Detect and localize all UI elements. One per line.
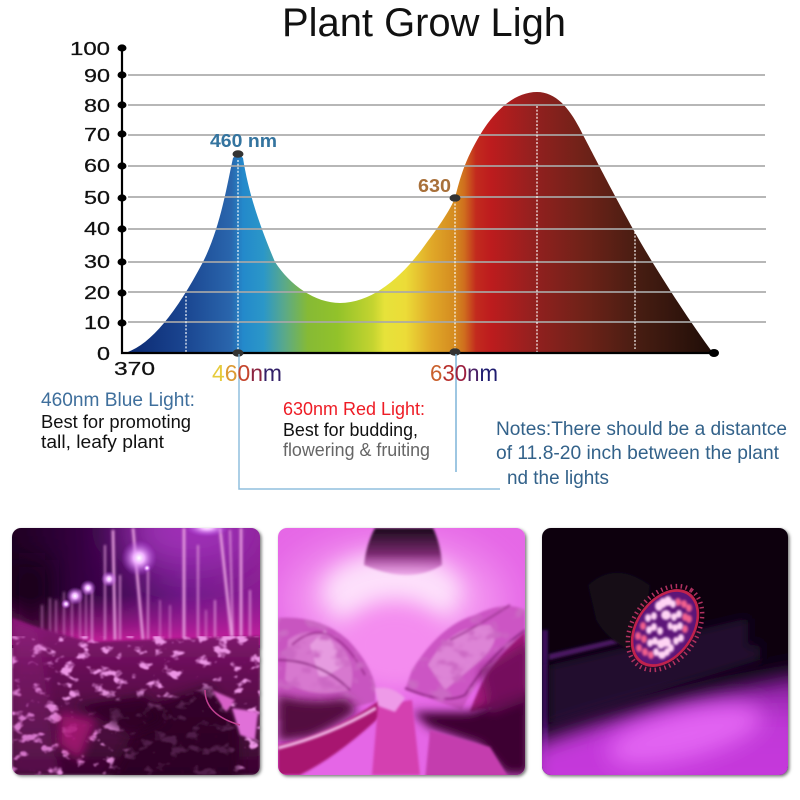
spectrum curve area [125, 92, 713, 353]
photo: plants under grow lights in a greenhouse [11, 527, 264, 779]
dotted wavelength guides [186, 106, 635, 352]
notes: nd the lights [507, 467, 609, 489]
blue light description: Best for promoting [41, 411, 191, 432]
label: 460 nm peak: 460 nm [210, 131, 277, 151]
chart: light spectrum [70, 39, 766, 379]
y axis labels: 370 [114, 359, 155, 379]
photo: grow bulb above cabbages [278, 528, 530, 780]
red light description [283, 419, 430, 460]
y axis labels: 40 [84, 219, 110, 239]
blue light heading: 460nm Blue Light: [41, 390, 195, 411]
photo: LED grow bulb lit in the dark [541, 527, 792, 779]
label: 630 peak: 630 [418, 176, 451, 196]
y axis labels: 60 [84, 156, 110, 176]
horizontal grid lines [128, 75, 766, 322]
foliage [12, 618, 260, 790]
red light heading: 630nm Red Light: [283, 398, 425, 419]
y axis labels [70, 39, 155, 379]
y axis labels: 80 [84, 96, 110, 116]
right cabbage [405, 605, 525, 712]
y axis labels: 30 [84, 252, 110, 272]
glowing floor [542, 654, 788, 775]
support poles [42, 528, 250, 650]
LED disc [626, 584, 704, 672]
y axis labels: 0 [97, 344, 110, 364]
y axis labels: 50 [84, 188, 110, 208]
y axis labels: 10 [84, 313, 110, 333]
y axis labels: 90 [84, 66, 110, 86]
left cabbage [278, 618, 376, 720]
dark shadows under leaves [278, 640, 530, 780]
peak markers [232, 150, 719, 357]
bulb [364, 528, 442, 575]
text block: blue light [41, 390, 195, 452]
x axis label: 630nm: 630nm [430, 360, 498, 386]
x axis label: 460nm: 460nm [212, 360, 282, 386]
red light description: Best for budding, [283, 419, 418, 440]
connector lines [239, 354, 500, 489]
y axis labels: 20 [84, 283, 110, 303]
notes: of 11.8-20 inch between the plant [496, 442, 780, 464]
y axis labels: 100 [70, 39, 110, 59]
bulb body [588, 572, 650, 655]
red light description: flowering & fruiting [283, 439, 430, 460]
LED chips [635, 598, 692, 659]
title: Plant Grow Ligh [282, 1, 566, 45]
y axis and x axis [122, 48, 714, 353]
notes: Notes:There should be a distantce [496, 418, 787, 440]
text block: red light [283, 398, 430, 460]
blue light description [41, 411, 191, 452]
y axis tick dots [118, 44, 126, 327]
notes [496, 418, 787, 489]
lamps [62, 528, 226, 609]
y axis labels: 70 [84, 125, 110, 145]
blue light description: tall, leafy plant [41, 431, 164, 452]
